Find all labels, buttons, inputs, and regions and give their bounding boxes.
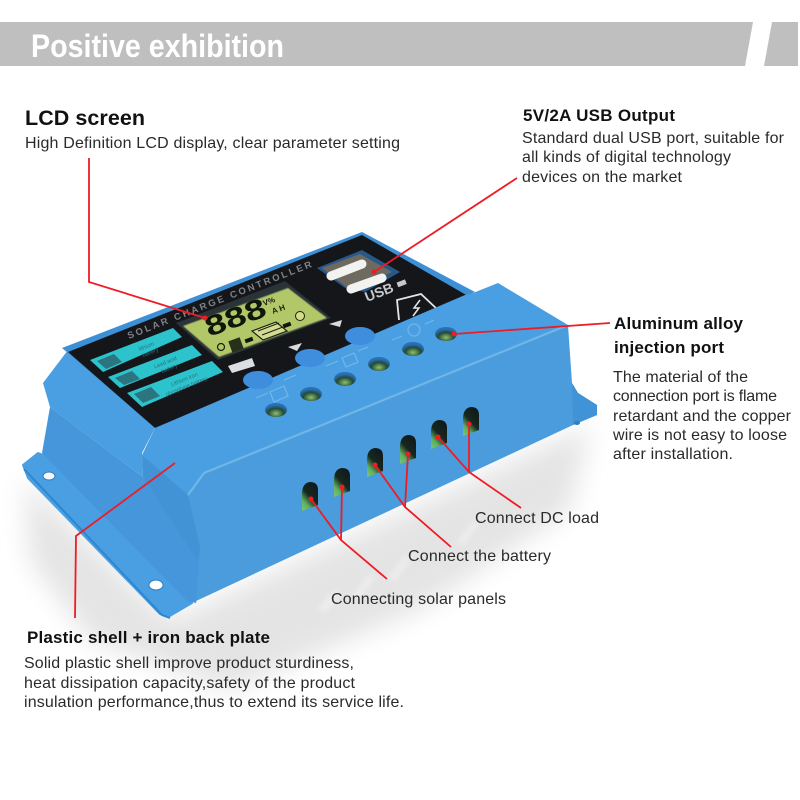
header banner [0,22,798,66]
LCD screen: 888 [200,292,270,343]
product: solar charge controller [23,232,597,618]
text: USB output: Standard dual USB port, suitable for [522,130,785,147]
text: aluminum alloy injection port: retardant and the copper [613,408,792,425]
text: aluminum alloy injection port: Aluminum alloy [614,314,744,333]
text: aluminum alloy injection port: after installation. [613,446,733,463]
line: battery [375,465,451,547]
terminal screw holes [265,327,457,417]
label: connecting solar panels: Connecting solar panels [331,591,506,608]
callout dots [202,270,472,502]
battery type tags: phosphate battery [165,376,208,398]
wire terminal slots [302,407,479,511]
text: LCD screen: LCD screen [25,106,145,130]
black control panel [68,235,468,428]
right flange hole [574,421,580,425]
line: USB output [374,178,517,272]
LCD screen: V% [262,295,276,308]
line: solar panels [311,499,387,579]
text: USB output [522,106,785,186]
LCD screen: A H [271,303,287,316]
battery type tags: lithium [138,341,155,353]
line: LCD screen [89,158,205,318]
battery type tags [90,328,223,407]
text: aluminum alloy injection port: The material of the [613,369,748,386]
text: LCD screen: High Definition LCD display, clear parameter setting [25,135,400,152]
USB dual port [317,250,407,305]
banner title: Positive exhibition [31,28,284,64]
left end wall and flange [23,350,204,618]
text: USB output: 5V/2A USB Output [523,106,675,125]
text: aluminum alloy injection port [612,314,792,463]
battery type tags: Lithium iron [170,372,199,388]
text: aluminum alloy injection port: injection port [614,338,724,357]
text: plastic shell: Solid plastic shell improve product sturdiness, [24,655,354,672]
shell highlight ridge [188,325,568,495]
LCD screen [176,281,331,360]
text: plastic shell: insulation performance,thus to extend its service life. [24,694,404,711]
desk reflections [318,522,480,612]
battery type tags: battery [142,347,160,359]
panel printed title: SOLAR CHARGE CONTROLLER [126,259,314,342]
text: USB output: all kinds of digital technology [522,149,731,166]
line: aluminum port [454,323,610,334]
front shell [142,283,597,601]
text: plastic shell: Plastic shell + iron back plate [27,628,270,647]
product shadow [25,425,590,690]
line: DC load [438,437,521,508]
top panel rim [62,232,475,432]
battery type tags: Lead acid [153,356,178,370]
USB dual port: USB [362,279,396,305]
battery symbol [397,294,438,320]
text: plastic shell: heat dissipation capacity,safety of the product [24,675,356,692]
text: aluminum alloy injection port: connection port is flame [613,388,777,405]
control buttons [228,320,375,389]
text: aluminum alloy injection port: wire is not easy to loose [612,427,787,444]
battery type tags: battery [161,363,179,375]
callout lines [75,158,610,618]
line: plastic shell [75,463,175,618]
text: LCD screen [25,106,400,152]
label: connect DC load: Connect DC load [475,510,599,527]
text: USB output: devices on the market [522,169,683,186]
label: connect the battery: Connect the battery [408,548,551,565]
embossed terminal symbols [256,320,434,402]
text: plastic shell [24,628,404,711]
